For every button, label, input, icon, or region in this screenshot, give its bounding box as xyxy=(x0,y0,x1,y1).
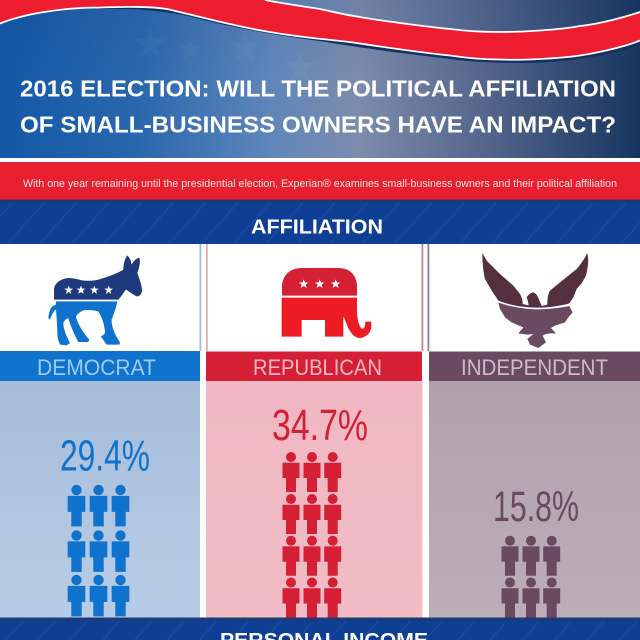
panel: independent xyxy=(428,244,640,618)
value: 34.7%: 34.7% xyxy=(272,401,368,450)
icon: donkey xyxy=(48,255,142,345)
value: 15.8%: 15.8% xyxy=(493,483,579,531)
people icons: republican xyxy=(282,452,341,618)
stat column: republican xyxy=(206,381,422,618)
title xyxy=(20,76,616,138)
subtitle banner xyxy=(0,158,640,200)
section heading band: affiliation: AFFILIATION xyxy=(251,216,383,238)
stat column: independent xyxy=(429,381,640,618)
section heading band: affiliation xyxy=(0,200,640,244)
label: republican xyxy=(206,352,422,382)
icon: elephant xyxy=(282,268,371,338)
label: democrat: DEMOCRAT xyxy=(37,355,156,380)
label: independent xyxy=(429,352,640,382)
label: democrat xyxy=(0,351,200,382)
icon: eagle xyxy=(482,253,588,348)
label: independent: INDEPENDENT xyxy=(461,355,608,380)
title: OF SMALL-BUSINESS OWNERS HAVE AN IMPACT? xyxy=(20,112,616,138)
header background xyxy=(0,0,640,160)
people icons: independent xyxy=(502,536,560,618)
panel: democrat xyxy=(0,244,201,618)
red swoosh ribbon xyxy=(0,0,640,63)
subtitle banner: With one year remaining until the presidential election, Experian® examines small-business owners and their political affiliation xyxy=(23,178,617,190)
value: 29.4%: 29.4% xyxy=(60,432,150,480)
section heading band: personal income xyxy=(0,618,640,640)
stat column: democrat xyxy=(0,381,200,618)
people icons: democrat xyxy=(68,485,129,616)
panel: republican xyxy=(206,244,423,618)
label: republican: REPUBLICAN xyxy=(253,355,382,380)
title: 2016 ELECTION: WILL THE POLITICAL AFFILIATION xyxy=(20,76,616,102)
